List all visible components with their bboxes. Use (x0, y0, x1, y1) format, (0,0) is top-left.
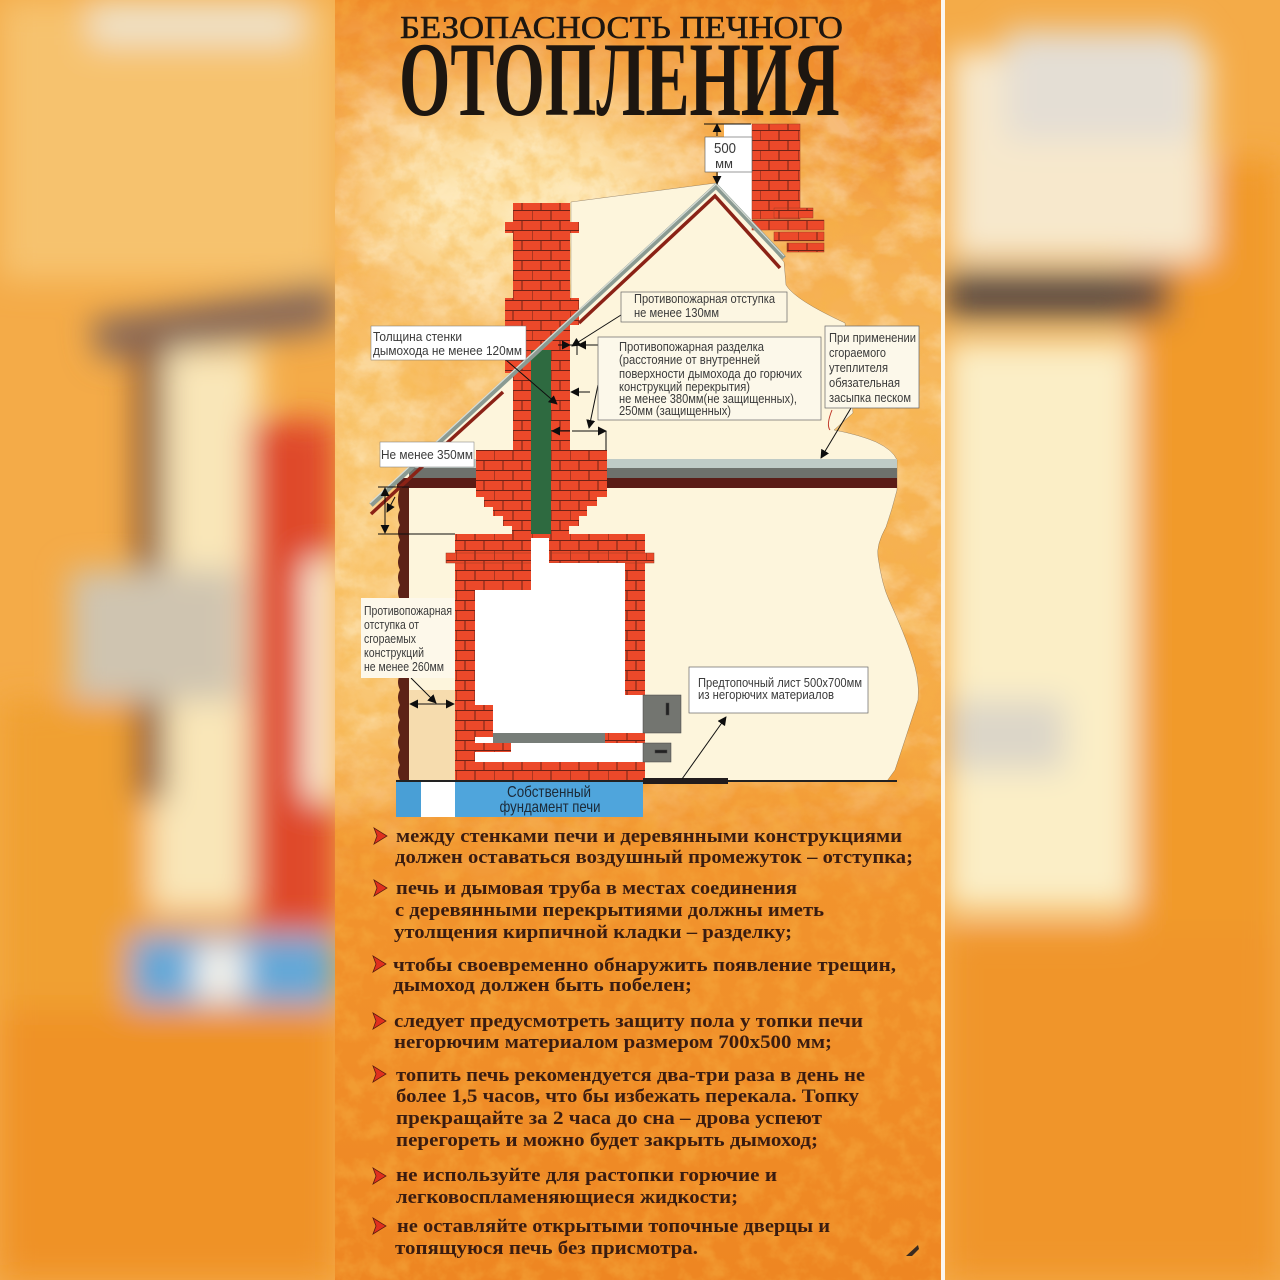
rule 6: не используйте для растопки горючие и (396, 1166, 777, 1186)
label: setback from combustibles (361, 598, 455, 678)
floor warm shading (409, 690, 455, 781)
label: combustible insulation: засыпка песком (829, 391, 911, 405)
label: combustible insulation (825, 326, 919, 408)
rule 3: чтобы своевременно обнаружить появление трещин, (393, 956, 896, 976)
rule 6: легковоспламеняющиеся жидкости; (396, 1188, 738, 1208)
label: combustible insulation: обязательная (829, 376, 900, 390)
label: pre-furnace sheet: Предтопочный лист 500х700мм (698, 676, 862, 690)
title (399, 9, 843, 138)
label: at least 350 mm: Не менее 350мм (381, 448, 473, 462)
label: pre-furnace sheet (689, 667, 868, 713)
rule 1: между стенками печи и деревянными конструкциями (396, 827, 902, 847)
rule 3 (373, 956, 896, 996)
dimension arrows and leaders (378, 124, 851, 779)
roof grey and red stripes (370, 184, 784, 514)
label: setback from combustibles: сгораемых (364, 632, 417, 646)
label: firebreak: 250мм (защищенных) (619, 404, 731, 418)
label: firebreak: не менее 380мм(не защищенных), (619, 392, 797, 406)
title: БЕЗОПАСНОСТЬ ПЕЧНОГО (400, 9, 843, 45)
rule 6 (373, 1166, 777, 1208)
label: flue wall thickness: Толщина стенки (373, 330, 462, 344)
rule 2: с деревянными перекрытиями должны иметь (395, 901, 824, 921)
label: firebreak: поверхности дымохода до горючих (619, 367, 803, 381)
rule 1 (374, 827, 913, 868)
label: combustible insulation: При применении (829, 331, 916, 345)
rule 4 (373, 1012, 863, 1053)
rule 5: топить печь рекомендуется два-три раза в день не (396, 1066, 865, 1086)
label: fire setback 130 mm: Противопожарная отступка (634, 292, 775, 306)
label: flue wall thickness: дымохода не менее 120мм (373, 344, 522, 358)
rule 2: утолщения кирпичной кладки – разделку; (394, 923, 792, 943)
label: combustible insulation: сгораемого (829, 346, 886, 360)
label: pre-furnace sheet: из негорючих материалов (698, 688, 834, 702)
log wall (398, 488, 409, 780)
label: firebreak: (расстояние от внутренней (619, 353, 760, 367)
poster background panel (320, 0, 990, 1280)
rule 5 (373, 1066, 865, 1151)
label: 500 mm: мм (715, 156, 733, 171)
label: 500 mm (705, 137, 752, 172)
rule 7 (373, 1217, 830, 1259)
safety rules list (373, 827, 913, 1259)
diagram: stove and chimney cross-section (361, 124, 919, 817)
ceiling layers (397, 459, 897, 488)
rule 2: печь и дымовая труба в местах соединения (396, 879, 797, 899)
rule 7: топящуюся печь без присмотра. (395, 1239, 698, 1259)
main chimney brickwork (505, 203, 579, 450)
chimney firebreak thickening (476, 450, 607, 538)
floor line and pre-furnace sheet (396, 778, 897, 784)
label: setback from combustibles: не менее 260мм (364, 660, 444, 674)
foundation: фундамент печи (500, 799, 600, 816)
title: ОТОПЛЕНИЯ (399, 21, 840, 138)
rule 5: прекращайте за 2 часа до сна – дрова успеют (396, 1109, 822, 1129)
label: setback from combustibles: Противопожарная (364, 604, 452, 618)
rule 4: негорючим материалом размером 700х500 мм; (394, 1033, 832, 1053)
rule 5: более 1,5 часов, что бы избежать перекала. Топку (396, 1087, 860, 1107)
foundation: Собственный (507, 784, 591, 801)
label: flue wall thickness (371, 326, 526, 360)
rule 3: дымоход должен быть побелен; (393, 976, 692, 996)
label: firebreak: Противопожарная разделка (619, 340, 764, 354)
rule 1: должен оставаться воздушный промежуток – отступка; (395, 848, 913, 868)
rule 2 (374, 879, 824, 943)
icon: small pen mark (906, 1245, 919, 1256)
rule 7: не оставляйте открытыми топочные дверцы и (397, 1217, 830, 1237)
stove doors (643, 695, 681, 762)
flue: green (531, 350, 551, 538)
white gap beside top chimney (718, 124, 752, 222)
label: at least 350 mm (380, 442, 474, 467)
rule 5: перегореть и можно будет закрыть дымоход; (396, 1131, 818, 1151)
foundation (396, 782, 643, 817)
label: fire setback 130 mm: не менее 130мм (634, 306, 719, 320)
label: combustible insulation: утеплителя (829, 361, 888, 375)
label: setback from combustibles: конструкций (364, 646, 424, 660)
label: setback from combustibles: отступка от (364, 618, 419, 632)
house interior cream shape (397, 183, 918, 781)
label: firebreak: конструкций перекрытия) (619, 380, 750, 394)
rule 4: следует предусмотреть защиту пола у топки печи (394, 1012, 863, 1032)
label: fire setback 130 mm (621, 292, 787, 322)
label: firebreak (598, 337, 821, 420)
stove body (446, 534, 654, 780)
top right chimney (752, 124, 824, 252)
label: 500 mm: 500 (714, 140, 736, 157)
